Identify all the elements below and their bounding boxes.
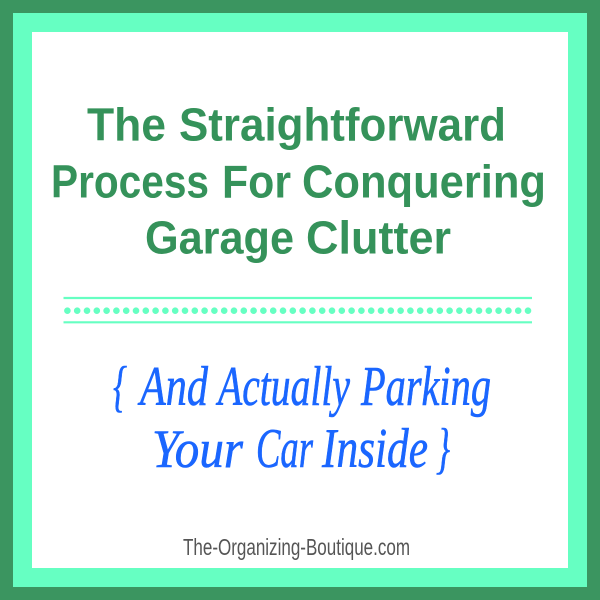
title: For bbox=[222, 156, 291, 208]
title bbox=[51, 98, 546, 264]
title: The bbox=[87, 98, 166, 150]
subtitle: Parking bbox=[360, 356, 491, 418]
website credit: The-Organizing-Boutique.com bbox=[183, 534, 410, 560]
title: Garage bbox=[145, 212, 294, 264]
dotted divider bbox=[64, 298, 532, 322]
panel: white centre bbox=[32, 32, 568, 568]
title: Straightforward bbox=[179, 98, 506, 150]
subtitle: Actually bbox=[215, 356, 350, 418]
title: Process bbox=[51, 156, 209, 208]
subtitle: { bbox=[113, 356, 127, 418]
subtitle bbox=[113, 356, 491, 480]
subtitle: Car bbox=[256, 418, 313, 480]
title: Clutter bbox=[306, 212, 451, 264]
subtitle: } bbox=[436, 418, 450, 480]
subtitle: Inside bbox=[321, 418, 428, 480]
subtitle: And bbox=[137, 356, 209, 418]
title: Conquering bbox=[302, 156, 546, 208]
subtitle: Your bbox=[152, 419, 244, 479]
